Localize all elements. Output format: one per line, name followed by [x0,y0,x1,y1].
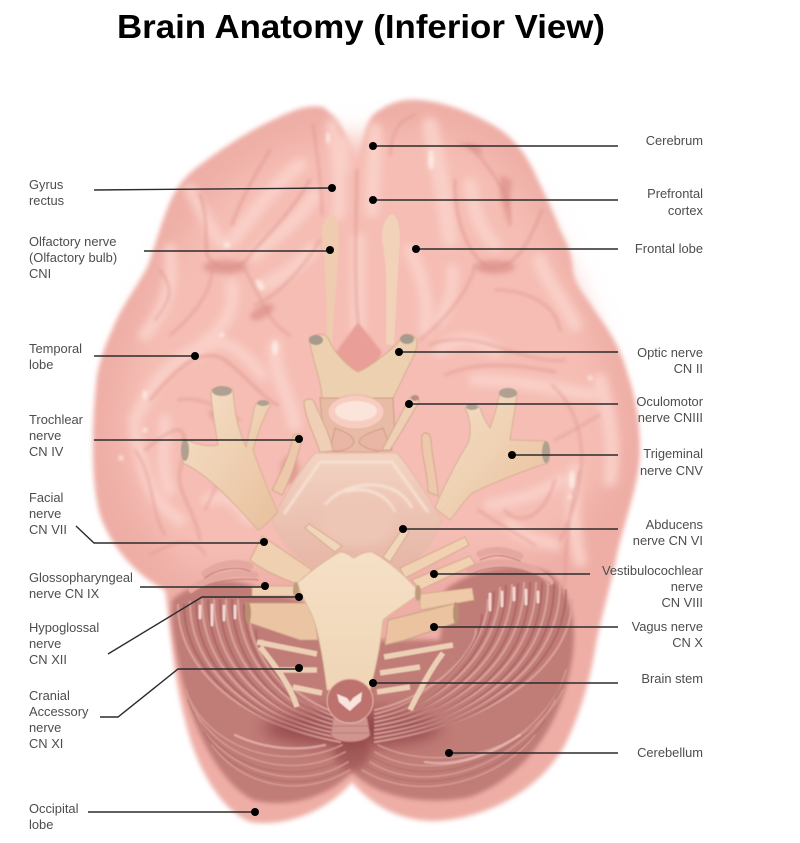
dark sulcus folds [203,142,515,484]
cerebellum folia stripes [178,583,572,744]
label: Optic nerve: Optic nerve [637,345,703,360]
label: Occipital lobe: Occipital [29,801,78,816]
label: Cerebrum: Cerebrum [646,133,703,148]
label: Abducens nerve: nerve CN VI [633,533,703,548]
left labels [29,177,133,832]
cerebellum flocculus lobules [190,550,552,595]
label: Prefrontal cortex: cortex [668,203,704,218]
label: Cranial Accessory nerve: Accessory [29,704,89,719]
label: Gyrus rectus: Gyrus [29,177,63,192]
gyri sulci [135,115,600,585]
label: Gyrus rectus: rectus [29,193,64,208]
pons [272,453,442,570]
label: Cranial Accessory nerve: CN XI [29,736,63,751]
label: Olfactory nerve: Olfactory nerve [29,234,116,249]
label: Vestibulocochlear nerve: nerve [671,579,703,594]
label: Vestibulocochlear nerve: Vestibulocochlear [602,563,703,578]
label: Cranial Accessory nerve: nerve [29,720,61,735]
label: Trigeminal nerve: nerve CNV [640,463,703,478]
olfactory nerve left [322,216,339,345]
trochlear nerves [272,433,438,496]
label: Trochlear nerve: nerve [29,428,61,443]
label: Olfactory nerve: (Olfactory bulb) [29,250,117,265]
leader dots [191,142,516,816]
label: Optic nerve: CN II [674,361,703,376]
olfactory nerve right [382,214,400,345]
label: Frontal lobe: Frontal lobe [635,241,703,256]
leader lines [76,146,618,812]
cerebellum tips highlights [200,588,538,625]
trigeminal left [181,386,278,530]
optic nerves and chiasm [309,334,417,400]
label: Oculomotor nerve: nerve CNIII [638,410,703,425]
label: Glossopharyngeal nerve: nerve CN IX [29,586,100,601]
label: Trochlear nerve: CN IV [29,444,64,459]
label: Facial nerve: CN VII [29,522,67,537]
label: Vagus nerve: Vagus nerve [632,619,703,634]
label: Brain stem: Brain stem [641,671,703,686]
trigeminal right [435,388,550,520]
label: Facial nerve: nerve [29,506,61,521]
label: Olfactory nerve: CNI [29,266,51,281]
label: Abducens nerve: Abducens [646,517,703,532]
infundibulum and mammillary [320,395,395,452]
right labels [602,133,704,760]
cerebellum lower arcs [186,670,566,786]
label: Oculomotor nerve: Oculomotor [636,394,703,409]
cranial nerves around brain stem [245,536,475,710]
label: Glossopharyngeal nerve: Glossopharyngeal [29,570,133,585]
label: Hypoglossal nerve: CN XII [29,652,67,667]
label: Temporal lobe: Temporal [29,341,82,356]
label: Facial nerve: Facial [29,490,63,505]
label: Occipital lobe: lobe [29,817,53,832]
label: Vagus nerve: CN X [672,635,703,650]
label: Cerebellum: Cerebellum [637,745,703,760]
cerebrum body [93,100,640,823]
label: Trigeminal nerve: Trigeminal [643,446,703,461]
label: Prefrontal cortex: Prefrontal [647,186,703,201]
cerebellum [172,214,574,803]
label: Hypoglossal nerve: nerve [29,636,61,651]
label: Hypoglossal nerve: Hypoglossal [29,620,99,635]
label: Temporal lobe: lobe [29,357,53,372]
label: Cranial Accessory nerve: Cranial [29,688,70,703]
medulla cut end [327,679,373,742]
gyri ridges [135,125,612,560]
optic chiasm cavity [336,322,382,373]
label: Vestibulocochlear nerve: CN VIII [661,595,703,610]
title: Brain Anatomy (Inferior View) [117,9,605,46]
label: Trochlear nerve: Trochlear [29,412,83,427]
gyri highlights [118,132,592,499]
oculomotor nerves [304,395,419,452]
brain stem medulla [293,524,421,690]
